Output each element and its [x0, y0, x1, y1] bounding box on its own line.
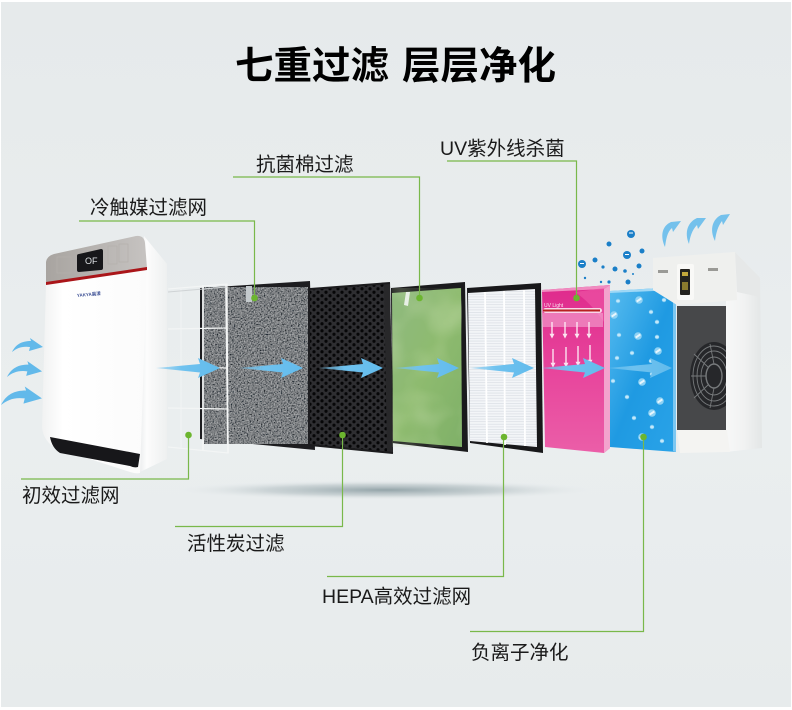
callout: 抗菌棉过滤: 抗菌棉过滤 — [256, 154, 354, 176]
callout: 活性炭过滤: 活性炭过滤 — [187, 533, 285, 555]
purifier display — [77, 249, 103, 272]
purifier side panel — [138, 236, 167, 473]
title: 七重过滤 — [235, 45, 389, 88]
airflow arrows — [156, 358, 672, 378]
callout: 初效过滤网: 初效过滤网 — [22, 485, 120, 507]
purifier buttons — [57, 244, 128, 273]
filter 7: negative ion panel — [610, 287, 676, 452]
purifier display: OF — [85, 256, 98, 266]
filter 5: HEPA — [467, 283, 543, 453]
UV lamp: UV Light — [544, 303, 564, 309]
UV lamp — [543, 303, 603, 327]
filter 2: cold catalyst — [200, 281, 315, 450]
back side column — [726, 252, 762, 452]
negative ions — [578, 230, 644, 284]
filter 1: wire pre-filter — [168, 284, 228, 453]
control board — [677, 264, 694, 300]
back top block — [653, 252, 737, 305]
fan grille — [690, 342, 726, 410]
floor shadow — [170, 480, 600, 500]
base — [677, 430, 730, 453]
title: 层层净化 — [402, 45, 556, 88]
filter 4: antibacterial cotton — [391, 282, 468, 452]
icon: outflow arrows — [662, 214, 730, 247]
callout: 抗菌棉过滤 — [233, 154, 423, 301]
callout: 冷触媒过滤网: 冷触媒过滤网 — [90, 197, 207, 219]
air purifier front — [42, 236, 167, 473]
callout: 负离子净化 — [470, 434, 647, 664]
callout: HEPA高效过滤网: HEPA高效过滤网 — [322, 586, 471, 608]
back of purifier — [653, 252, 762, 453]
callout: 活性炭过滤 — [175, 432, 346, 555]
filter 6: UV panel — [542, 285, 610, 453]
filter tab — [404, 292, 410, 306]
callout: 冷触媒过滤网 — [79, 197, 258, 301]
fan compartment — [677, 306, 738, 430]
callout: UV紫外线杀菌 — [440, 138, 580, 301]
filter tab — [246, 286, 252, 302]
purifier control panel — [46, 236, 147, 283]
purifier bottom vent — [50, 437, 140, 467]
purifier body — [42, 267, 147, 473]
back slots — [658, 268, 718, 273]
callout: HEPA高效过滤网 — [322, 434, 507, 608]
purifier logo: YAKYA晨漾 — [77, 290, 102, 299]
UV rays — [550, 322, 592, 367]
purifier red stripe — [46, 267, 147, 285]
water drops — [610, 296, 666, 443]
callout: UV紫外线杀菌: UV紫外线杀菌 — [440, 138, 565, 160]
icon: air intake arrows — [1, 338, 43, 405]
callout: 负离子净化: 负离子净化 — [471, 642, 569, 664]
callout: 初效过滤网 — [21, 432, 192, 507]
filter 3: activated carbon — [310, 283, 393, 453]
